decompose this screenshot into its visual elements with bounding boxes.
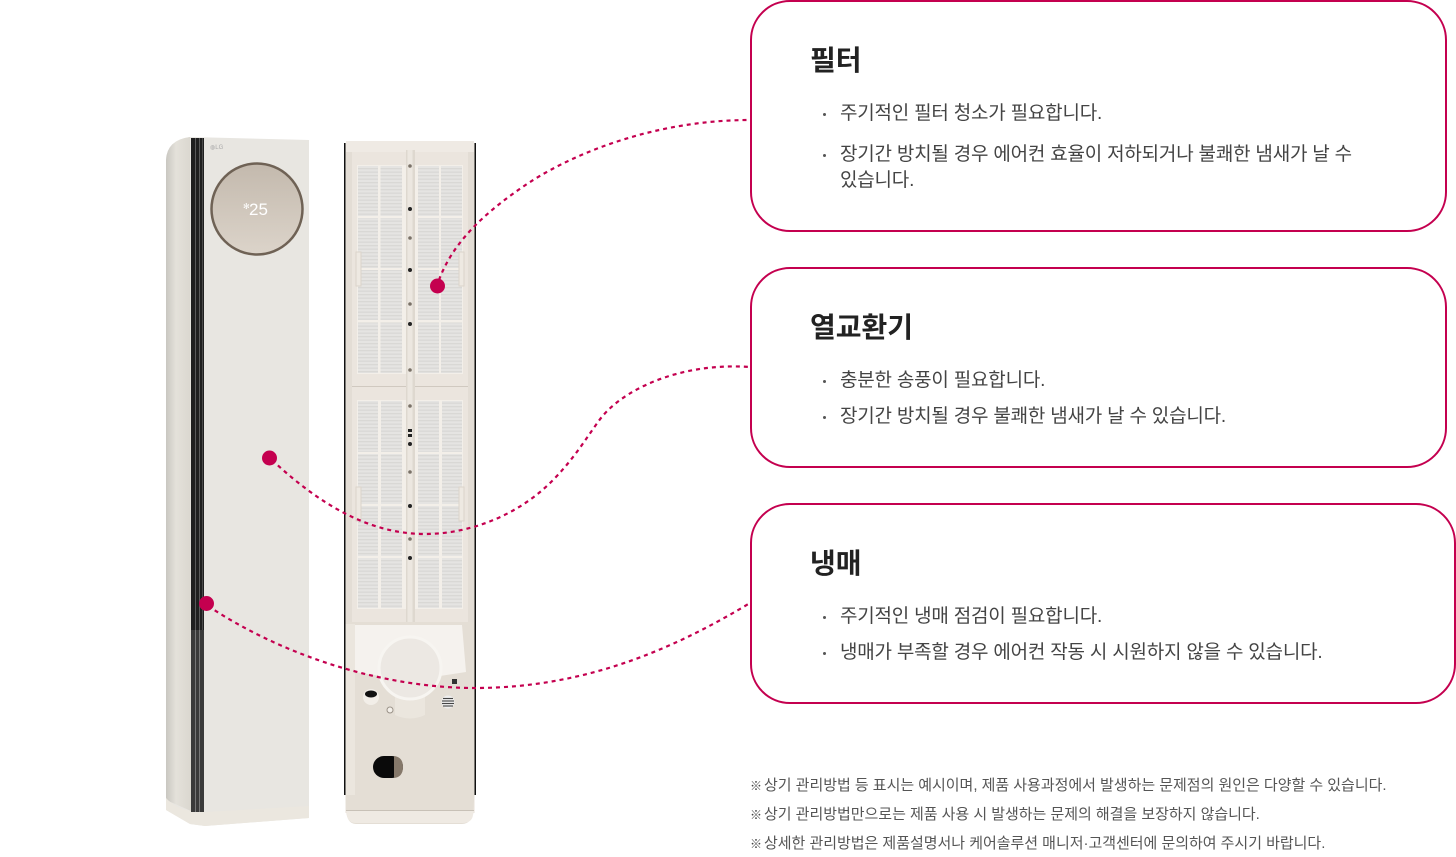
connector: filter xyxy=(439,120,750,280)
round display xyxy=(212,164,302,254)
marker: filter xyxy=(430,278,445,294)
note 1: ※ xyxy=(750,779,762,793)
panel: refrigerant xyxy=(750,503,1456,704)
filter handles xyxy=(356,252,464,521)
bullet text 1: 주기적인 냉매 점검이 필요합니다. xyxy=(840,606,1102,627)
bullet text 1: 주기적인 필터 청소가 필요합니다. xyxy=(840,103,1102,124)
note 2: ※ xyxy=(750,808,762,822)
panel: filter xyxy=(750,0,1447,232)
note 3: 상세한 관리방법은 제품설명서나 케어솔루션 매니저·고객센터에 문의하여 주시기 바랍니다. xyxy=(764,835,1325,852)
heading: filter: 필터 xyxy=(810,45,862,76)
speaker grille xyxy=(442,696,454,708)
drain hole xyxy=(363,689,379,705)
fan cover xyxy=(379,637,441,718)
bullet text 2: 있습니다. xyxy=(840,170,914,191)
connector: heat exchanger xyxy=(272,366,750,534)
bullet text 2: 장기간 방치될 경우 불쾌한 냄새가 날 수 있습니다. xyxy=(840,406,1226,427)
screw xyxy=(387,707,393,713)
round display: ✻ xyxy=(243,202,250,211)
note 1: 상기 관리방법 등 표시는 예시이며, 제품 사용과정에서 발생하는 문제점의 원인은 다양할 수 있습니다. xyxy=(764,777,1386,794)
air conditioner inside view xyxy=(344,141,476,824)
pipe opening xyxy=(373,756,403,778)
heading: refrigerant: 냉매 xyxy=(810,548,862,579)
bullet text 2: 장기간 방치될 경우 에어컨 효율이 저하되거나 불쾌한 냄새가 날 수 xyxy=(840,144,1352,165)
dark vent strip xyxy=(191,138,204,812)
heading: heat exchanger: 열교환기 xyxy=(810,312,913,343)
note 2: 상기 관리방법만으로는 제품 사용 시 발생하는 문제의 해결을 보장하지 않습니다. xyxy=(764,806,1260,823)
bullet text 2 xyxy=(840,144,1352,191)
note 3: ※ xyxy=(750,837,762,851)
round display: 25 xyxy=(249,200,268,219)
lower body xyxy=(346,622,474,824)
filter mesh panels xyxy=(358,166,462,608)
connector: refrigerant xyxy=(208,603,750,688)
bullet text 2: 냉매가 부족할 경우 에어컨 작동 시 시원하지 않을 수 있습니다. xyxy=(840,642,1322,663)
logo: ◍LG xyxy=(210,145,224,151)
air conditioner front view xyxy=(166,137,309,826)
footnotes xyxy=(750,777,1386,852)
marker: refrigerant xyxy=(199,596,214,611)
panel: heat exchanger xyxy=(750,267,1447,468)
marker: heat exchanger xyxy=(262,450,277,466)
centre bar with fasteners xyxy=(406,150,415,622)
bullet text 1: 충분한 송풍이 필요합니다. xyxy=(840,370,1045,391)
